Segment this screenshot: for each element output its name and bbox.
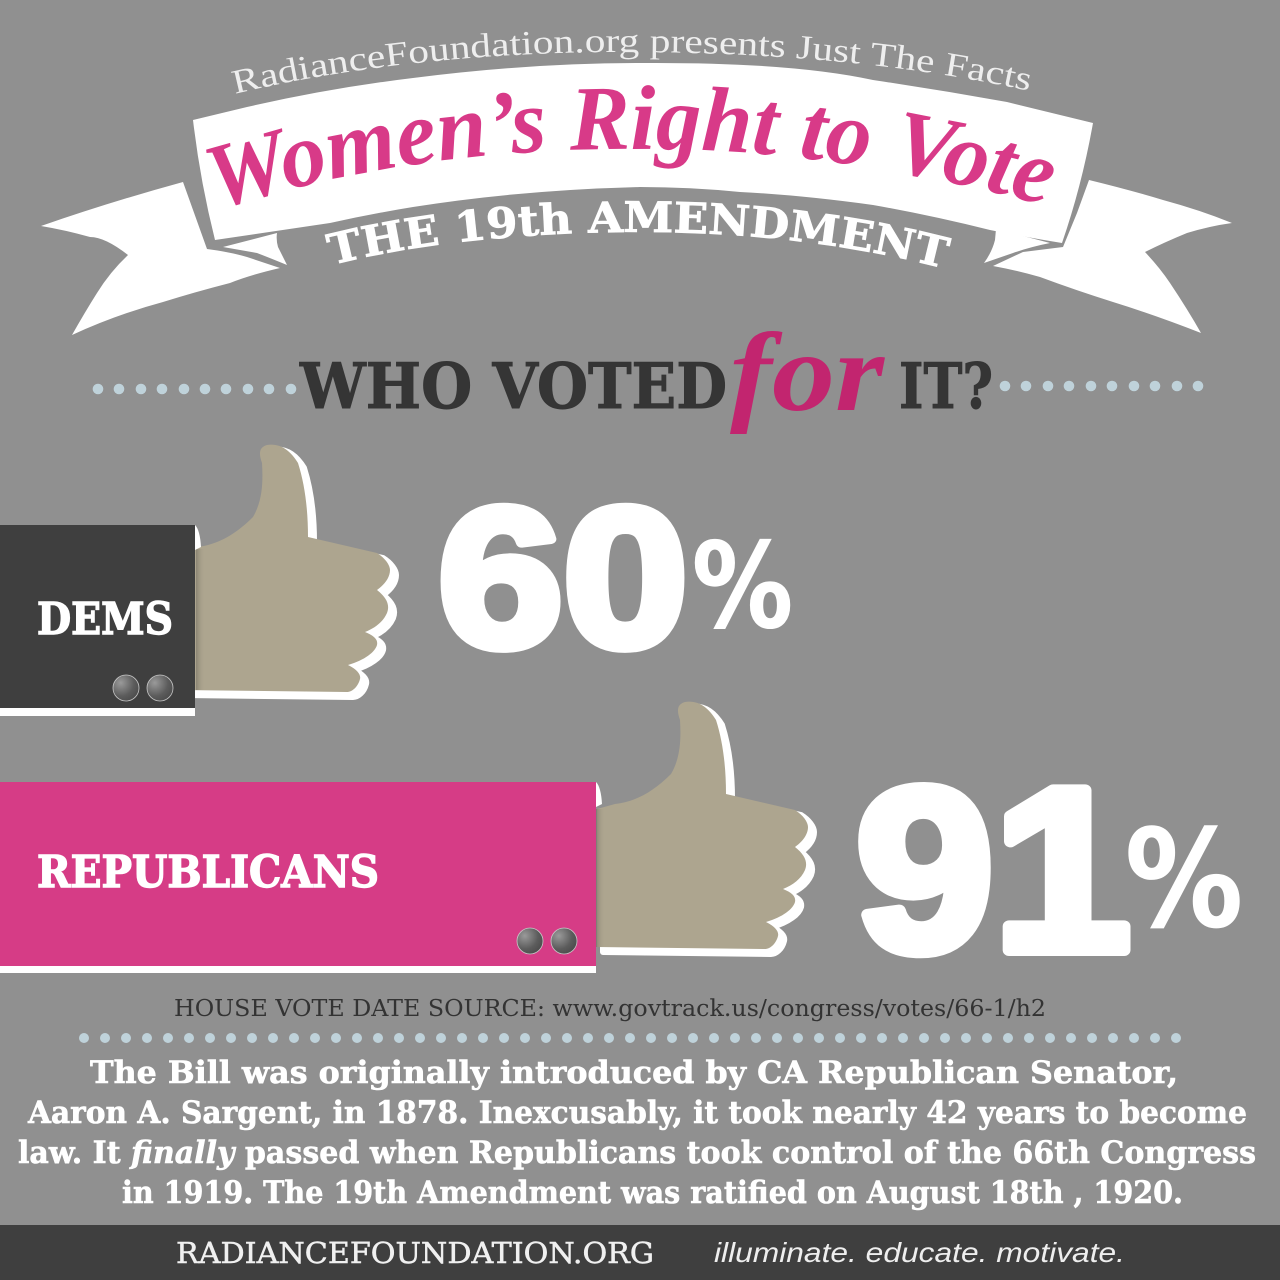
title: Women’s Right to Vote <box>206 85 1054 206</box>
dotted divider: right <box>1000 381 1203 391</box>
body text: in 1919. The 19th Amendment was ratified on August 18th , 1920. <box>122 1175 1183 1211</box>
body text: Aaron A. Sargent, in 1878. Inexcusably, it took nearly 42 years to become <box>27 1095 1247 1131</box>
hand: republicans <box>596 702 814 954</box>
subtitle: THE 19th AMENDMENT <box>324 200 952 267</box>
banner ribbon <box>41 63 1232 335</box>
dems thumbs up arm <box>0 445 396 716</box>
percentage: dems 60%: % <box>692 517 793 655</box>
label: republicans: REPUBLICANS <box>37 847 379 898</box>
heading: who voted for it: IT? <box>899 349 993 423</box>
sleeve: republicans <box>0 782 596 966</box>
percentage: republicans 91%: % <box>1125 801 1243 958</box>
republicans thumbs up arm <box>0 702 814 973</box>
cuff edge <box>0 525 201 716</box>
percentage: republicans 91%: 91 <box>856 741 1131 1000</box>
hand: dems <box>179 445 396 697</box>
heading: who voted for it: WHO VOTED <box>299 349 727 423</box>
percentage: dems 60% <box>438 467 793 688</box>
label: dems: DEMS <box>37 594 173 645</box>
footer bar <box>0 1225 1280 1280</box>
cuff buttons: dems <box>113 675 173 701</box>
sleeve: dems <box>0 525 195 708</box>
footer: site name: RADIANCEFOUNDATION.ORG <box>176 1236 654 1270</box>
cuff edge: republicans <box>0 782 602 973</box>
heading: who voted for it: for <box>730 311 886 435</box>
dotted divider: lower <box>84 1033 1178 1043</box>
header line: presenter: RadianceFoundation.org presents Just The Facts <box>231 32 1030 94</box>
body text: law. It finally passed when Republicans took control of the 66th Congress <box>18 1135 1256 1171</box>
percentage: republicans 91% <box>856 741 1243 1000</box>
body text: The Bill was originally introduced by CA Republican Senator, <box>90 1055 1178 1091</box>
body text <box>18 1055 1256 1211</box>
percentage: dems 60%: 60 <box>438 467 688 688</box>
cuff buttons: republicans <box>517 928 577 954</box>
dotted divider: left <box>93 384 296 394</box>
source line: HOUSE VOTE DATE SOURCE: www.govtrack.us/congress/votes/66-1/h2 <box>174 996 1046 1022</box>
heading: who voted for it <box>299 311 993 435</box>
footer: tagline: illuminate. educate. motivate. <box>714 1237 1125 1268</box>
